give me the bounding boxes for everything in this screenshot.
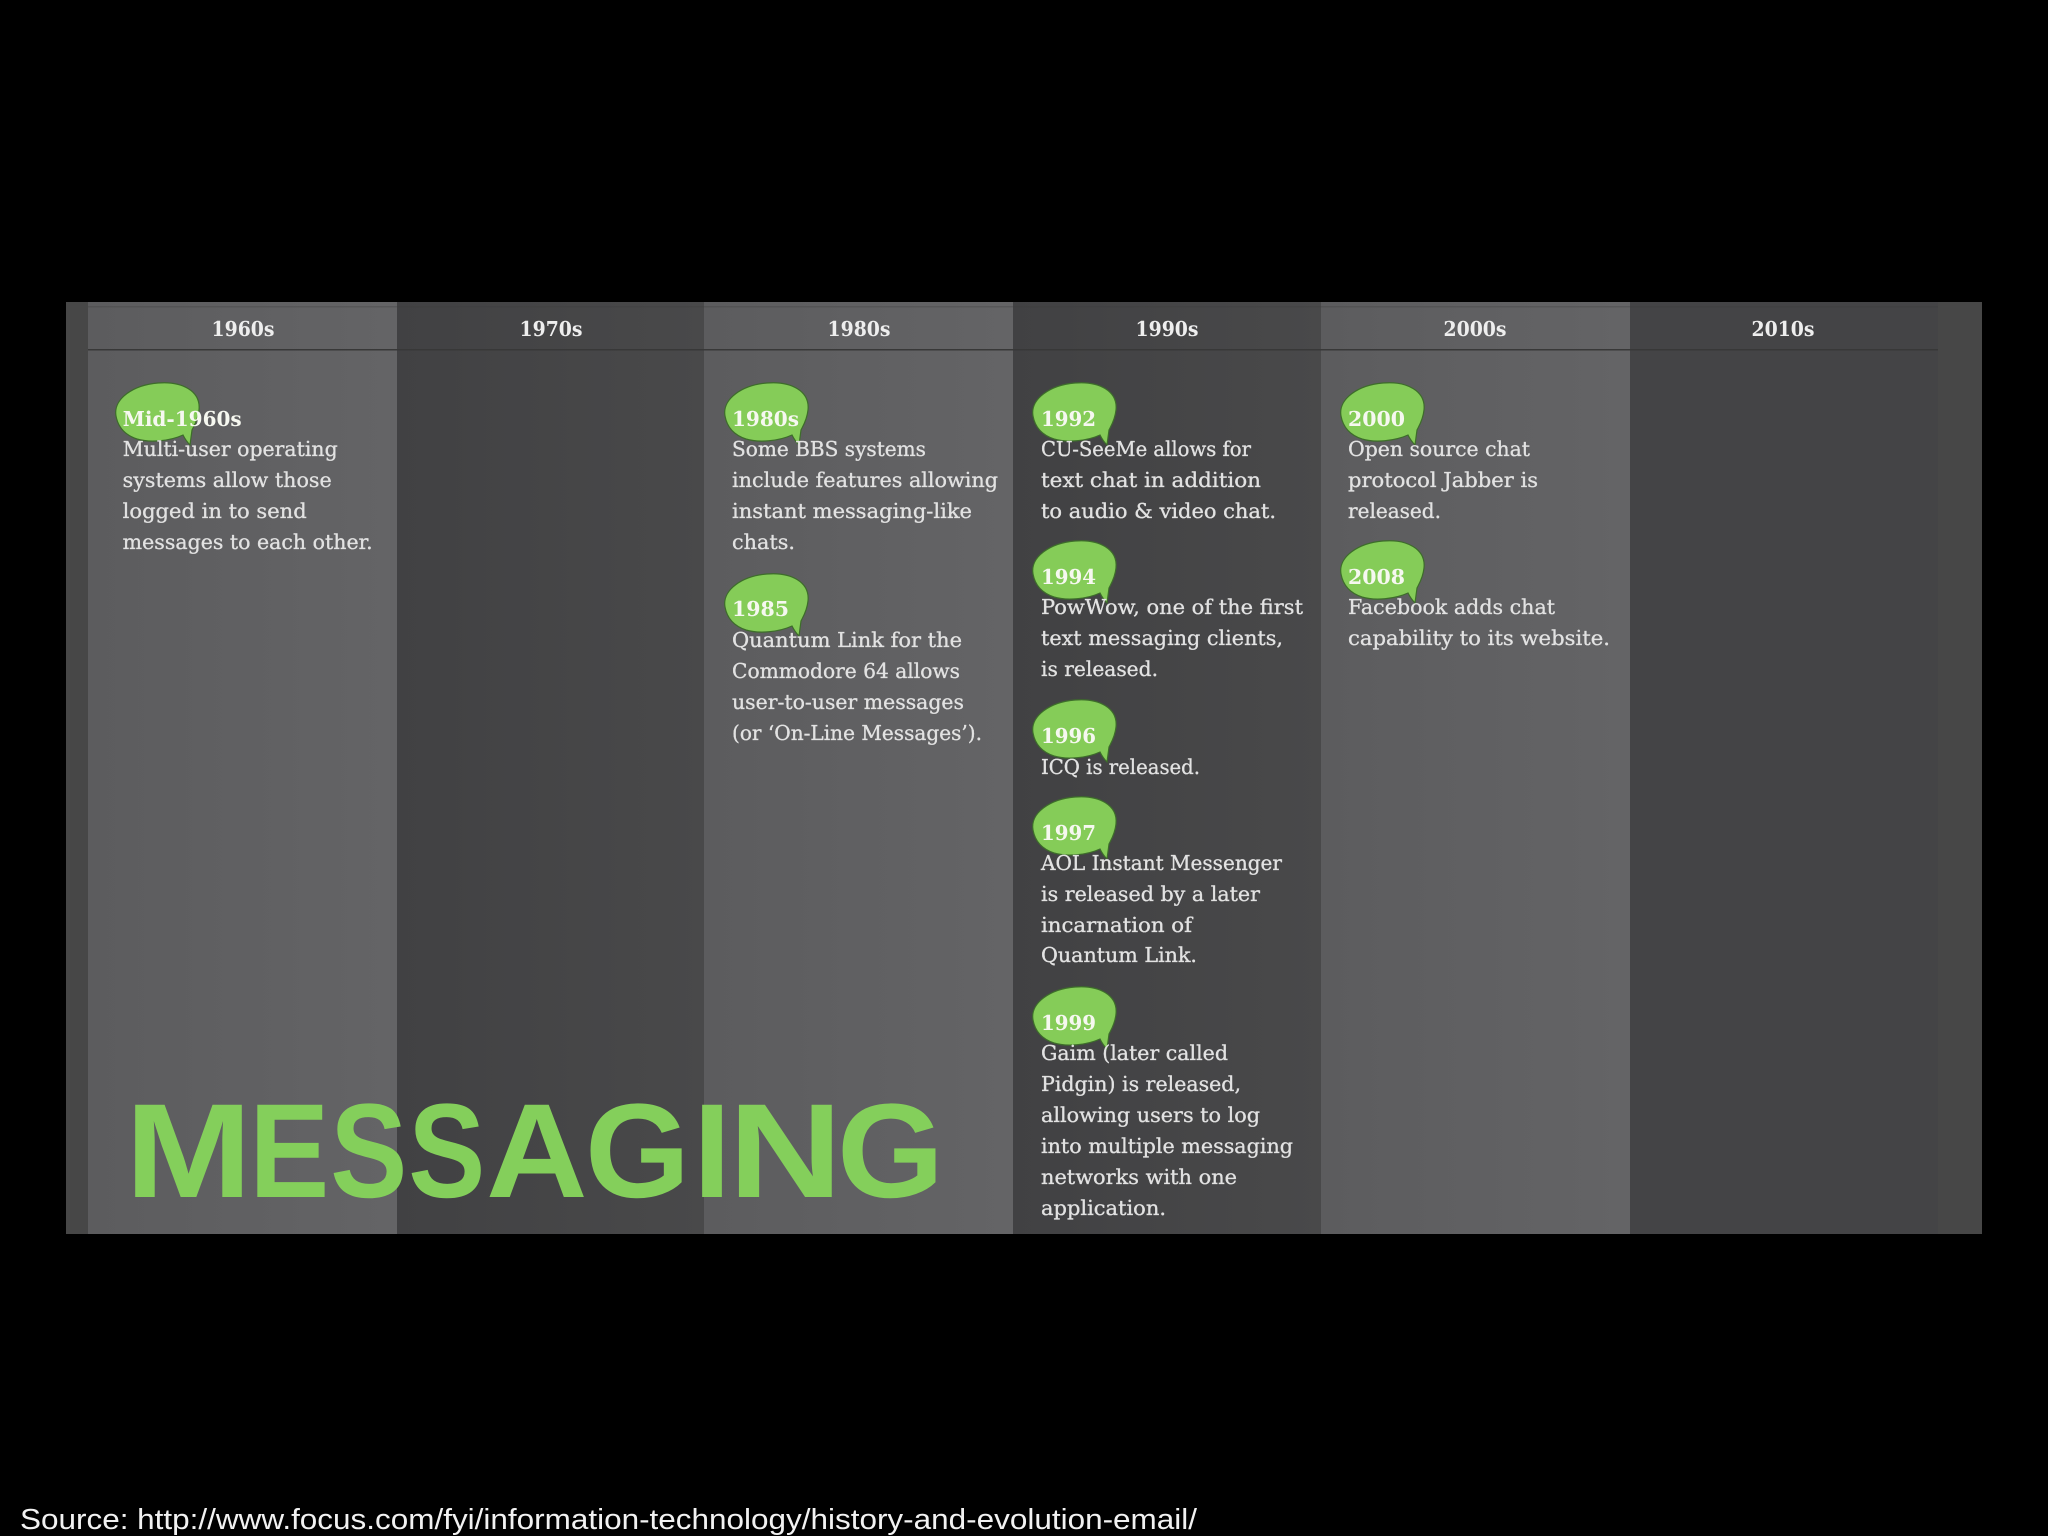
- description: is released.: [1041, 657, 1158, 681]
- description: [1041, 1041, 1293, 1220]
- title: N: [728, 1077, 842, 1226]
- description: Open source chat: [1348, 437, 1531, 461]
- description: Multi-user operating: [123, 437, 338, 461]
- description: [1041, 437, 1276, 523]
- header: 1970s: 1970s: [520, 317, 582, 341]
- icon: speech bubble: [116, 383, 199, 445]
- description: Commodore 64 allows: [732, 659, 960, 683]
- description: Quantum Link for the: [732, 628, 962, 652]
- description: (or ‘On-Line Messages’).: [732, 721, 982, 745]
- column band: 1980s: [704, 302, 1013, 1234]
- icon: speech bubble: [1341, 383, 1424, 445]
- event: 1992: [1033, 383, 1276, 523]
- event: 1996: [1033, 700, 1200, 779]
- description: messages to each other.: [123, 530, 373, 554]
- title: I: [693, 1077, 731, 1226]
- column band: 1970s: [397, 302, 704, 1234]
- header: 1990s: 1990s: [1136, 317, 1198, 341]
- timeline panel: [66, 302, 1982, 1234]
- title: S: [408, 1077, 485, 1226]
- title: S: [330, 1077, 407, 1226]
- icon: speech bubble: [1033, 987, 1116, 1049]
- description: networks with one: [1041, 1165, 1237, 1189]
- description: incarnation of: [1041, 913, 1193, 937]
- description: logged in to send: [123, 499, 307, 523]
- year label: 2008: [1348, 565, 1405, 589]
- event: 2000: [1341, 383, 1538, 523]
- icon: speech bubble: [1033, 797, 1116, 859]
- description: [123, 437, 373, 554]
- description: released.: [1348, 499, 1441, 523]
- description: application.: [1041, 1196, 1166, 1220]
- event: 1994: [1033, 541, 1304, 681]
- description: to audio & video chat.: [1041, 499, 1276, 523]
- description: [1041, 595, 1304, 681]
- description: [1040, 851, 1282, 967]
- title: M: [125, 1077, 252, 1226]
- description: Some BBS systems: [732, 437, 926, 461]
- icon: speech bubble: [725, 574, 808, 636]
- description: Gaim (later called: [1041, 1041, 1228, 1065]
- year label: 2000: [1348, 407, 1405, 431]
- description: include features allowing: [732, 468, 998, 492]
- description: [1348, 437, 1538, 523]
- year label: 1999: [1041, 1011, 1096, 1035]
- icon: speech bubble: [1033, 541, 1116, 603]
- event: 1999: [1033, 987, 1293, 1220]
- icon: speech bubble: [1033, 700, 1116, 762]
- description: ICQ is released.: [1041, 755, 1200, 779]
- description: capability to its website.: [1348, 626, 1610, 650]
- description: [732, 437, 998, 554]
- event: 1980s: [725, 383, 998, 554]
- source line: Source: http://www.focus.com/fyi/information-technology/history-and-evolution-email/: [20, 1504, 1198, 1536]
- description: allowing users to log: [1041, 1103, 1260, 1127]
- year label: 1997: [1041, 821, 1096, 845]
- year label: 1992: [1041, 407, 1096, 431]
- description: Quantum Link.: [1041, 943, 1197, 967]
- description: AOL Instant Messenger: [1040, 851, 1282, 875]
- description: protocol Jabber is: [1348, 468, 1538, 492]
- event: 1985: [725, 574, 982, 745]
- header: 2010s: 2010s: [1752, 317, 1814, 341]
- header: 1960s: 1960s: [212, 317, 274, 341]
- description: [732, 628, 982, 745]
- year label: Mid-1960s: [123, 407, 242, 431]
- decade headers: [212, 317, 1814, 341]
- event: 2008: [1341, 541, 1610, 650]
- description: user-to-user messages: [732, 690, 964, 714]
- description: systems allow those: [123, 468, 332, 492]
- event: 1997: [1033, 797, 1282, 967]
- year label: 1996: [1041, 724, 1096, 748]
- icon: speech bubble: [1033, 383, 1116, 445]
- icon: speech bubble: [725, 383, 808, 445]
- title: A: [486, 1077, 588, 1226]
- description: CU-SeeMe allows for: [1041, 437, 1251, 461]
- column band: 2010s: [1630, 302, 1938, 1234]
- title: G: [585, 1077, 690, 1226]
- header: 2000s: 2000s: [1444, 317, 1506, 341]
- icon: speech bubble: [1341, 541, 1424, 603]
- description: text messaging clients,: [1041, 626, 1283, 650]
- column band: 2000s: [1321, 302, 1630, 1234]
- description: text chat in addition: [1041, 468, 1261, 492]
- description: instant messaging-like: [732, 499, 972, 523]
- description: PowWow, one of the first: [1041, 595, 1304, 619]
- description: into multiple messaging: [1041, 1134, 1293, 1158]
- year label: 1994: [1041, 565, 1096, 589]
- description: is released by a later: [1041, 882, 1260, 906]
- column band: 1990s: [1013, 302, 1321, 1234]
- description: Pidgin) is released,: [1041, 1072, 1241, 1096]
- year label: 1980s: [732, 407, 799, 431]
- header: 1980s: 1980s: [828, 317, 890, 341]
- title: E: [249, 1077, 329, 1226]
- description: [1348, 595, 1610, 650]
- event: Mid-1960s: [116, 383, 373, 554]
- title: G: [837, 1077, 944, 1226]
- year label: 1985: [732, 597, 789, 621]
- description: chats.: [732, 530, 795, 554]
- column band: 1960s: [88, 302, 397, 1234]
- description: Facebook adds chat: [1348, 595, 1556, 619]
